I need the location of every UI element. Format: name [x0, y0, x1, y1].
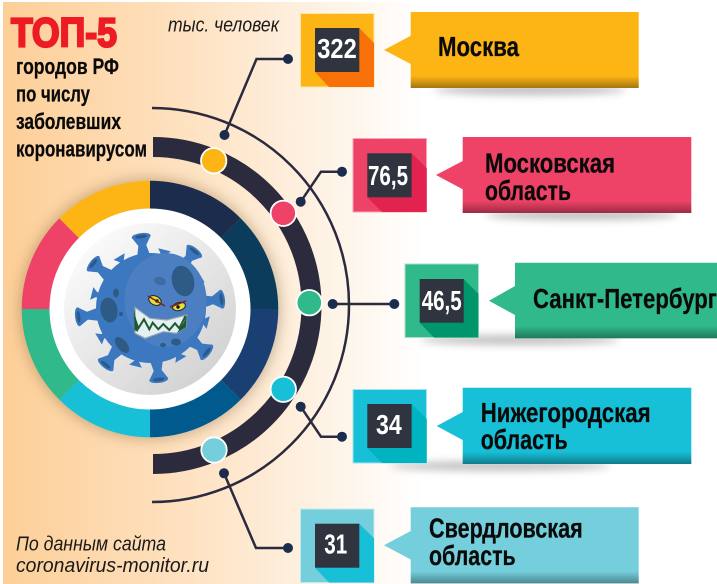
arc marker dots — [201, 148, 322, 463]
row: Нижегородская область: область — [481, 424, 568, 455]
row: Московская область: область — [485, 175, 571, 206]
row: Москва: Москва — [438, 31, 519, 62]
donut ring — [20, 179, 280, 439]
subtitle: коронавирусом — [16, 136, 147, 162]
thin arc — [152, 108, 349, 502]
title: ТОП-5 — [11, 10, 117, 56]
dark arc — [153, 147, 312, 464]
row: Свердловская область: Свердловская — [429, 512, 583, 543]
row: Москва — [300, 12, 639, 95]
row: Свердловская область: 31 — [324, 528, 347, 559]
row: Москва: 322 — [317, 33, 357, 64]
source note: coronavirus-monitor.ru — [16, 555, 209, 577]
background gradient — [3, 2, 423, 584]
subtitle: городов РФ — [16, 54, 119, 79]
row: Свердловская область — [300, 507, 639, 584]
row: Свердловская область: область — [429, 540, 516, 571]
row: Санкт-Петербург: 46,5 — [422, 285, 462, 316]
source note — [16, 534, 209, 577]
icon: angry coronavirus — [74, 232, 226, 384]
subtitle — [16, 54, 147, 162]
row: Нижегородская область: Нижегородская — [481, 397, 651, 428]
source note: По данным сайта — [16, 534, 166, 556]
row: Московская область — [353, 137, 691, 220]
connector lines — [219, 54, 399, 553]
row: Московская область: 76,5 — [368, 160, 408, 191]
row: Нижегородская область: 34 — [376, 409, 402, 440]
subtitle: заболевших — [16, 109, 121, 134]
row: Санкт-Петербург — [405, 263, 717, 345]
row: Нижегородская область — [353, 388, 691, 471]
subtitle: по числу — [16, 82, 90, 106]
unit label: тыс. человек — [168, 14, 280, 36]
row: Московская область: Московская — [485, 148, 615, 179]
